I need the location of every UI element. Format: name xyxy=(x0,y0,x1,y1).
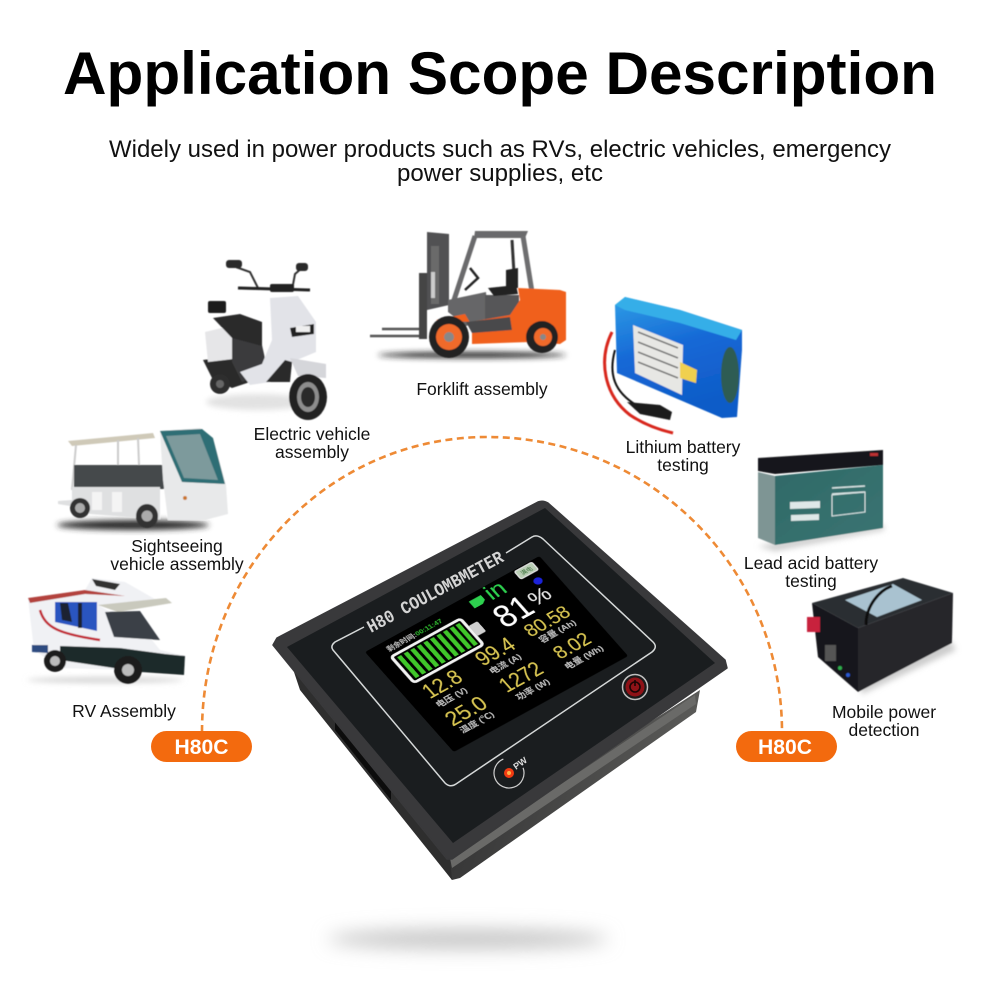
status battery: 满电 xyxy=(519,565,535,577)
icon: sightseeing bus xyxy=(57,428,228,530)
label: lead acid battery: testing xyxy=(785,571,837,591)
status dot xyxy=(532,576,544,586)
power button xyxy=(622,674,648,700)
label: mobile power: Mobile power xyxy=(832,702,936,722)
label: sightseeing xyxy=(110,536,244,574)
subtitle text block xyxy=(109,136,891,187)
coulomb meter device xyxy=(273,501,727,880)
icon: electric scooter xyxy=(203,260,327,420)
label: electric vehicle: assembly xyxy=(275,442,349,462)
icon: mobile power box xyxy=(807,578,956,694)
label: electric vehicle: Electric vehicle xyxy=(254,424,370,444)
label: sightseeing: vehicle assembly xyxy=(110,554,244,574)
remaining time: 剩余时间:00:11:47 xyxy=(385,617,445,653)
dashed orange arc connector xyxy=(202,437,782,732)
reading captions: 温度 (℃) xyxy=(457,709,496,735)
reading captions: 电量 (Wh) xyxy=(562,643,606,671)
label: RV: RV Assembly xyxy=(72,701,176,721)
reading captions: 电流 (A) xyxy=(487,652,524,676)
readings: 8.02 xyxy=(548,629,596,663)
reading captions: 容量 (Ah) xyxy=(536,618,578,645)
label: mobile power: detection xyxy=(848,720,920,740)
reading captions xyxy=(429,616,609,735)
subtitle text block: Widely used in power products such as RVs, electric vehicles, emergency xyxy=(109,136,891,163)
badge: H80C right: H80C xyxy=(758,736,812,759)
readings xyxy=(414,602,603,731)
label: mobile power xyxy=(832,702,936,740)
label: lead acid battery: Lead acid battery xyxy=(744,553,878,573)
title: Application Scope Description xyxy=(63,40,937,107)
label: sightseeing: Sightseeing xyxy=(131,536,223,556)
label: lithium battery xyxy=(626,437,741,475)
readings: 80.58 xyxy=(520,603,575,641)
PW indicator: PW xyxy=(511,755,529,772)
label: forklift: Forklift assembly xyxy=(416,379,548,399)
readings: 1272 xyxy=(494,658,549,697)
charge state: in xyxy=(479,577,513,605)
PW indicator xyxy=(490,754,529,792)
label: electric vehicle xyxy=(254,424,370,462)
reading captions: 功率 (W) xyxy=(513,676,552,702)
LCD screen xyxy=(364,554,628,752)
label: lithium battery: Lithium battery xyxy=(626,437,741,457)
state of charge: 81 xyxy=(484,588,542,635)
badge: H80C left xyxy=(151,731,252,762)
meter housing xyxy=(273,501,727,880)
readings: 99.4 xyxy=(470,634,521,671)
badge: H80C left: H80C xyxy=(174,736,228,759)
label: lead acid battery xyxy=(744,553,878,591)
readings: 25.0 xyxy=(440,692,493,731)
readings: 12.8 xyxy=(418,666,468,704)
reading captions: 电压 (V) xyxy=(433,685,469,709)
status battery xyxy=(514,562,538,579)
meter name text: H80 COULOMBMETER xyxy=(364,548,508,638)
icon: lead acid battery xyxy=(758,450,884,551)
LCD screen: % xyxy=(522,582,557,610)
icon: lithium battery pack xyxy=(605,297,742,433)
label: lithium battery: testing xyxy=(657,455,709,475)
icon: forklift xyxy=(370,231,566,358)
icon: RV motorhome xyxy=(27,578,185,684)
badge: H80C right xyxy=(736,731,837,762)
meter outline frame xyxy=(332,536,655,786)
charge arrow xyxy=(469,595,487,608)
floor shadow xyxy=(328,929,608,949)
battery gauge xyxy=(391,613,493,683)
subtitle text block: power supplies, etc xyxy=(397,160,603,187)
